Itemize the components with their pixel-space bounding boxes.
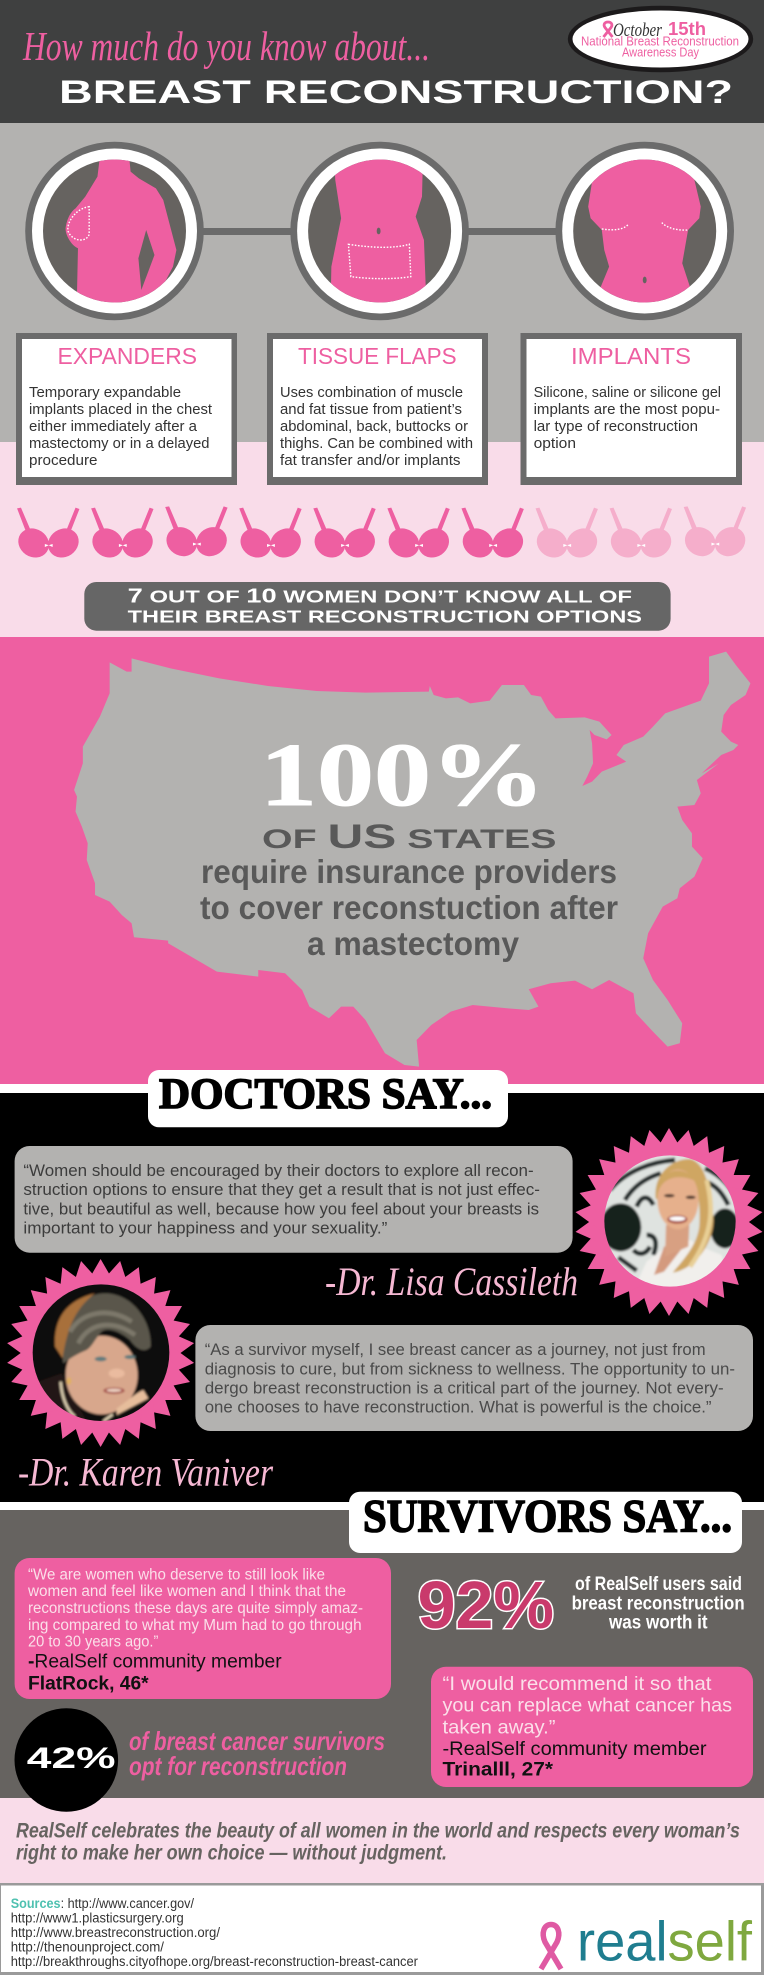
implants description: option xyxy=(534,435,576,452)
42% statistic circle xyxy=(15,1708,118,1812)
icon: expanders figure xyxy=(25,142,204,320)
expanders heading: EXPANDERS xyxy=(58,343,197,369)
icon: small pink ribbon xyxy=(604,22,612,37)
sources list: http://breakthroughs.cityofhope.org/breast-reconstruction-breast-cancer xyxy=(11,1954,418,1969)
quote: Dr. Karen Vaniver: diagnosis to cure, but from sickness to wellness. The opportunity to un- xyxy=(205,1359,735,1378)
quote: FlatRock: -RealSelf community member xyxy=(28,1652,282,1673)
tissue flaps description: thighs. Can be combined with xyxy=(280,435,473,452)
coverage statement: require insurance providers xyxy=(201,853,617,890)
panel: US states coverage xyxy=(0,637,764,1084)
quote: FlatRock xyxy=(15,1558,391,1699)
badge date: October xyxy=(613,20,662,41)
main title: BREAST RECONSTRUCTION? xyxy=(59,74,733,110)
panel: doctors say xyxy=(0,1070,764,1502)
pictogram: 7 of 10 bras xyxy=(15,506,749,559)
portrait: Dr. Karen Vaniver xyxy=(7,1259,194,1447)
92% statistic xyxy=(418,1568,745,1643)
doctors heading: DOCTORS SAY... xyxy=(159,1071,492,1118)
pale pink background xyxy=(0,442,764,637)
quote: Trinalll: you can replace what cancer has xyxy=(442,1695,732,1717)
implants description: Silicone, saline or silicone gel xyxy=(534,384,721,401)
expanders description xyxy=(29,384,213,469)
42% caption: opt for reconstruction xyxy=(129,1751,347,1781)
quote: Dr. Karen Vaniver: dergo breast reconstruction is a critical part of the journey. Not every- xyxy=(205,1379,724,1398)
92% statistic: was worth it xyxy=(608,1612,708,1633)
expanders description: either immediately after a xyxy=(29,418,198,435)
awareness day badge: Awareness Day xyxy=(622,46,700,60)
quote: Trinalll: “I would recommend it so that xyxy=(442,1673,712,1695)
callout: 7 out of 10 women xyxy=(84,582,671,631)
coverage statement: to cover reconstuction after xyxy=(200,889,618,926)
tissue flaps description: abdominal, back, buttocks or xyxy=(280,418,468,435)
expanders description: mastectomy or in a delayed xyxy=(29,435,210,452)
sources list: Sources: http://www.cancer.gov/ xyxy=(11,1896,194,1911)
sources list: http://thenounproject.com/ xyxy=(11,1940,164,1955)
tissue flaps description: fat transfer and/or implants xyxy=(280,452,460,469)
grey options background xyxy=(0,123,764,442)
header script line: How much do you know about... xyxy=(22,23,430,69)
quote: FlatRock: women and feel like women and I think that the xyxy=(27,1583,346,1600)
coverage statement: a mastectomy xyxy=(307,925,520,962)
quote: FlatRock: 20 to 30 years ago.” xyxy=(28,1634,158,1651)
panel: closing statement: right to make her own choice — without judgment. xyxy=(16,1841,447,1864)
quote: FlatRock: ing compared to what my Mum had to go through xyxy=(28,1617,362,1634)
implants heading: IMPLANTS xyxy=(571,343,691,369)
quote: FlatRock: reconstructions these days are quite simply amaz- xyxy=(28,1600,363,1617)
coverage statement xyxy=(200,853,618,962)
tissue flaps description xyxy=(280,384,473,469)
callout: 7 out of 10 women: 7 OUT OF 10 WOMEN DON’T KNOW ALL OF xyxy=(128,586,632,608)
quote: Trinalll: taken away.” xyxy=(442,1716,556,1738)
header band xyxy=(0,0,764,123)
panel: survivors say xyxy=(0,1490,764,1798)
tissue flaps description: Uses combination of muscle xyxy=(280,384,463,401)
implants description: lar type of reconstruction xyxy=(534,418,698,435)
panel: sources and logo xyxy=(0,1883,764,1975)
panel: closing statement xyxy=(0,1798,764,1883)
expanders description: Temporary expandable xyxy=(29,384,181,401)
portrait: Dr. Lisa Cassileth xyxy=(576,1128,762,1316)
signature: Dr. Lisa Cassileth: -Dr. Lisa Cassileth xyxy=(325,1259,578,1304)
100% statistic: 100% xyxy=(260,726,545,825)
panel: tissue flaps xyxy=(267,333,488,485)
quote: Dr. Lisa Cassileth xyxy=(15,1146,573,1253)
awareness day badge xyxy=(568,6,753,72)
white band xyxy=(0,1084,764,1093)
implants description: implants are the most popu- xyxy=(534,401,720,418)
quote: Dr. Karen Vaniver xyxy=(195,1325,753,1431)
sources list: http://www.breastreconstruction.org/ xyxy=(11,1925,220,1940)
connector lines between circles xyxy=(200,228,570,235)
white band xyxy=(0,1502,764,1510)
badge caption: National Breast Reconstruction xyxy=(581,35,739,49)
implants description xyxy=(534,384,721,452)
quote: Dr. Lisa Cassileth: struction options to ensure that they get a result that is not just effec- xyxy=(23,1180,540,1199)
quote: Dr. Karen Vaniver: one chooses to have reconstruction. What is powerful is the choice.” xyxy=(205,1398,712,1417)
awareness day badge: 15th xyxy=(668,19,706,39)
survivors heading: SURVIVORS SAY... xyxy=(363,1490,732,1542)
42% caption xyxy=(129,1726,385,1781)
92% statistic: breast reconstruction xyxy=(572,1593,745,1614)
icon: implants figure xyxy=(555,142,734,320)
callout: 7 out of 10 women: THEIR BREAST RECONSTRUCTION OPTIONS xyxy=(128,607,642,627)
sources list xyxy=(11,1896,418,1969)
tissue flaps description: and fat tissue from patient’s xyxy=(280,401,462,418)
quote: Dr. Karen Vaniver: “As a survivor myself, I see breast cancer as a journey, not just from xyxy=(205,1340,706,1359)
quote: FlatRock: “We are women who deserve to still look like xyxy=(28,1566,325,1583)
quote: Dr. Lisa Cassileth: important to your happiness and your sexuality.” xyxy=(23,1219,388,1238)
realself logo: realself xyxy=(577,1910,752,1973)
expanders description: procedure xyxy=(29,452,98,469)
map of the United States xyxy=(74,652,750,1067)
quote: Trinalll: Trinalll, 27* xyxy=(442,1759,553,1781)
icon: realself ribbon xyxy=(541,1924,561,1969)
icon: tissue flaps figure xyxy=(290,142,469,320)
signature: Dr. Karen Vaniver: -Dr. Karen Vaniver xyxy=(18,1450,273,1495)
panel: expanders xyxy=(16,333,237,485)
quote: FlatRock: FlatRock, 46* xyxy=(28,1673,149,1694)
42% statistic circle: 42% xyxy=(27,1742,115,1775)
92% statistic: 92% xyxy=(418,1568,554,1643)
42% caption: of breast cancer survivors xyxy=(129,1726,385,1756)
expanders description: implants placed in the chest xyxy=(29,401,213,418)
tissue flaps heading: TISSUE FLAPS xyxy=(298,343,457,369)
panel: implants xyxy=(520,333,742,485)
quote: Dr. Lisa Cassileth: “Women should be encouraged by their doctors to explore all recon- xyxy=(23,1161,534,1180)
quote: Trinalll: -RealSelf community member xyxy=(442,1738,707,1760)
quote: Trinalll xyxy=(431,1667,753,1787)
quote: Dr. Lisa Cassileth: tive, but beautiful as well, because how you feel about your breasts is xyxy=(23,1199,539,1218)
of US states: OF US STATES xyxy=(262,818,556,856)
sources list: http://www1.plasticsurgery.org xyxy=(11,1911,184,1926)
